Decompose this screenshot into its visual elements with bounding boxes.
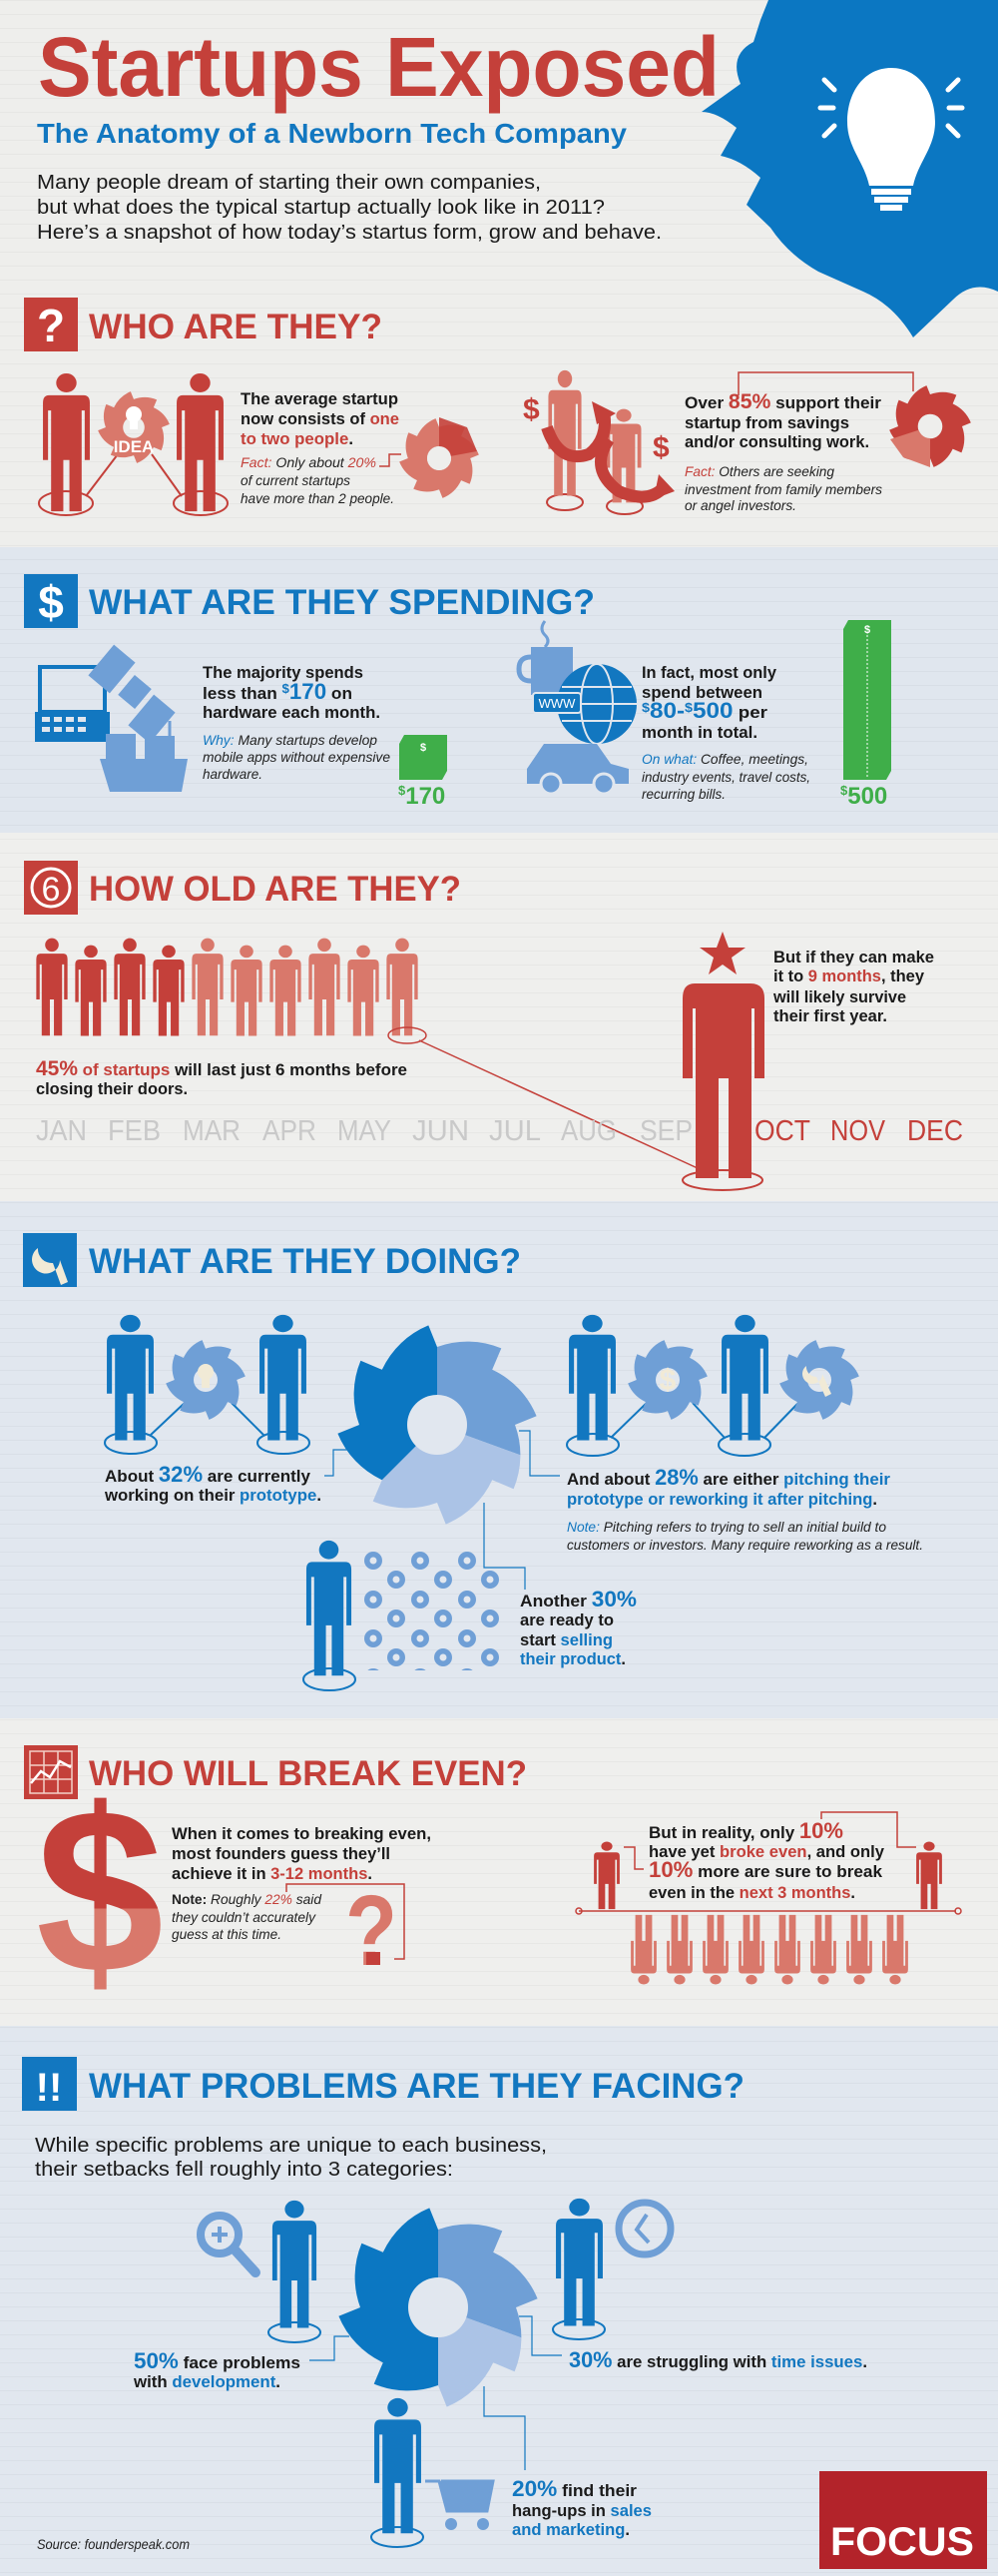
logo: FOCUS bbox=[819, 2471, 987, 2569]
months timeline: MAY bbox=[337, 1115, 391, 1147]
text: $170 on hardware: $ bbox=[282, 681, 290, 696]
text: 32% prototype bbox=[104, 1462, 321, 1505]
text: 28% pitching: prototype or reworking it after pitching. bbox=[567, 1490, 877, 1509]
months timeline: NOV bbox=[830, 1115, 886, 1147]
text: founders guess 3-12 months: Note: Roughly 22% said bbox=[172, 1891, 322, 1907]
heading: how old: HOW OLD ARE THEY? bbox=[89, 870, 461, 909]
text: one to two people: have more than 2 people. bbox=[241, 490, 394, 506]
heading: problems: !! bbox=[36, 2066, 62, 2110]
icon: figure with many gears bbox=[303, 1541, 504, 1690]
text: $170 on hardware: less than bbox=[203, 684, 276, 703]
text: $80-$500 per month: spend between bbox=[642, 683, 762, 702]
months timeline bbox=[36, 1115, 963, 1147]
intro text: Here’s a snapshot of how today’s startus form, grow and behave. bbox=[37, 222, 662, 244]
text: 85% self-funded: and/or consulting work. bbox=[685, 432, 869, 451]
text: 30% selling: Another 30% bbox=[520, 1587, 637, 1611]
text: $80-$500 per month: per bbox=[738, 703, 764, 722]
icon: self-funding figures with arrows: $ bbox=[653, 431, 670, 464]
text: 30% selling: are ready to bbox=[520, 1610, 614, 1629]
text: founders guess 3-12 months: guess at this time. bbox=[172, 1926, 281, 1942]
text: 32% prototype: working on their prototype. bbox=[104, 1486, 321, 1505]
panel: what are they doing bbox=[23, 1233, 923, 1690]
icon: question mark with bracket: ? bbox=[345, 1875, 397, 1987]
text: 28% pitching: And about 28% are either pitching their bbox=[567, 1465, 890, 1490]
months timeline: SEP bbox=[640, 1115, 693, 1147]
text: 30% selling: their product. bbox=[520, 1649, 626, 1668]
text: 28% pitching: Note: Pitching refers to trying to sell an initial build to bbox=[567, 1519, 886, 1535]
text: 85% self-funded: Over 85% support their bbox=[685, 390, 881, 413]
text: $170 on hardware: hardware. bbox=[203, 766, 262, 782]
text: survive 9 months: will likely survive bbox=[772, 987, 906, 1006]
text: problems intro bbox=[35, 2135, 547, 2181]
text: 50% development bbox=[133, 2348, 300, 2391]
icon: two figures with idea saw (prototype) bbox=[105, 1315, 309, 1454]
text: 28% pitching: customers or investors. Many require reworking as a result. bbox=[567, 1537, 923, 1553]
text: $170 on hardware: 170 bbox=[289, 679, 326, 704]
panel: what problems are they facing bbox=[22, 2057, 987, 2569]
chart: tri-colour saw blade bbox=[337, 1325, 537, 1524]
text: $80-$500 per month: recurring bills. bbox=[642, 786, 726, 802]
text: $80-$500 per month: month in total. bbox=[642, 723, 757, 742]
subtitle: The Anatomy of a Newborn Tech Company bbox=[37, 118, 627, 149]
icon: question mark with bracket bbox=[286, 1875, 404, 1987]
text: $170 on hardware: mobile apps without expensive bbox=[203, 749, 390, 765]
heading: problems bbox=[22, 2057, 745, 2111]
months timeline: FEB bbox=[108, 1115, 161, 1147]
icon: coffee, globe and car bbox=[519, 621, 637, 794]
panel: how old are they bbox=[24, 861, 963, 1190]
text: 45% of startups bbox=[36, 1057, 407, 1098]
text: 20% sales and marketing bbox=[512, 2476, 652, 2539]
text: founders guess 3-12 months: achieve it in 3-12 months. bbox=[172, 1864, 372, 1883]
text: 45% of startups: 45% of startups will last just 6 months before bbox=[36, 1057, 407, 1080]
icon: laptop, satellite and boat bbox=[35, 645, 188, 792]
logo: FOCUS: FOCUS bbox=[830, 2520, 974, 2564]
heading: break even: WHO WILL BREAK EVEN? bbox=[89, 1754, 527, 1793]
panel: who are they bbox=[24, 298, 971, 515]
icon: self-funding figures with arrows bbox=[523, 370, 675, 514]
months timeline: JAN bbox=[36, 1115, 87, 1147]
chart: $170 bill stack: $ bbox=[420, 742, 426, 754]
icon: figure with magnifier bbox=[201, 2201, 320, 2342]
icon: big survivor figure with star bbox=[683, 932, 764, 1190]
heading: how old bbox=[24, 861, 461, 915]
text: 20% sales and marketing: 20% find their bbox=[512, 2476, 637, 2501]
months timeline: AUG bbox=[561, 1115, 617, 1147]
text: only 10% broke even: But in reality, only 10% bbox=[649, 1818, 843, 1843]
text: 85% self-funded: startup from savings bbox=[685, 413, 849, 432]
icon: figure with cart bbox=[371, 2398, 493, 2547]
text: $80-$500 per month: In fact, most only bbox=[642, 663, 777, 682]
text: only 10% broke even: even in the next 3 months. bbox=[649, 1883, 855, 1902]
text: one to two people: of current startups bbox=[241, 472, 350, 488]
text: survive 9 months: their first year. bbox=[773, 1006, 887, 1025]
heading: break even bbox=[24, 1745, 527, 1799]
icon: figure with clock bbox=[553, 2199, 671, 2339]
icon: blue burst with light bulb bbox=[702, 0, 998, 337]
text: $80-$500 per month: $ bbox=[685, 700, 694, 715]
text: $80-$500 per month: 80- bbox=[650, 698, 685, 723]
text: founders guess 3-12 months bbox=[172, 1824, 431, 1942]
text: 85% self-funded bbox=[685, 372, 913, 513]
source: Source: founderspeak.com bbox=[37, 2536, 190, 2552]
text: one to two people: Fact: Only about 20% bbox=[241, 454, 376, 470]
text: 85% self-funded: investment from family members bbox=[685, 481, 882, 497]
icon: two founders with idea saw bbox=[39, 373, 228, 515]
icon: big dollar sign: $ bbox=[36, 1759, 164, 2022]
text: only 10% broke even bbox=[649, 1818, 885, 1902]
text: one to two people: The average startup bbox=[241, 389, 398, 408]
intro text bbox=[37, 172, 662, 244]
text: 45% of startups: closing their doors. bbox=[36, 1079, 188, 1098]
icon: red saw 85% bbox=[889, 385, 971, 467]
chart: row of 10 startup figures bbox=[36, 939, 418, 1035]
text: 85% self-funded: Fact: Others are seeking bbox=[685, 463, 834, 479]
icon: two founders with idea saw: IDEA bbox=[114, 437, 154, 456]
text: founders guess 3-12 months: most founders guess they’ll bbox=[172, 1844, 390, 1863]
months timeline: JUN bbox=[412, 1115, 469, 1147]
title: Startups Exposed bbox=[38, 20, 720, 114]
text: only 10% broke even: 10% more are sure to break bbox=[649, 1857, 883, 1882]
panel: what are they spending bbox=[24, 574, 891, 810]
text: one to two people: to two people. bbox=[241, 429, 353, 448]
icon: red saw 20% bbox=[379, 417, 479, 498]
heading: doing bbox=[23, 1233, 521, 1287]
arrow: connector lines bbox=[324, 1431, 560, 1590]
chart: problems saw blade bbox=[338, 2208, 537, 2406]
heading: how old: 6 bbox=[42, 871, 60, 909]
chart: $500 bill stack: $ bbox=[840, 783, 848, 798]
heading: problems: WHAT PROBLEMS ARE THEY FACING? bbox=[89, 2067, 745, 2106]
text: 30% time issues: 30% are struggling with time issues. bbox=[569, 2347, 867, 2372]
chart: $500 bill stack: $ bbox=[864, 624, 870, 636]
text: one to two people: now consists of one bbox=[241, 409, 399, 428]
icon: coffee, globe and car: WWW bbox=[539, 696, 576, 711]
text: 85% self-funded: or angel investors. bbox=[685, 497, 796, 513]
chart: $170 bill stack bbox=[398, 735, 447, 810]
text: survive 9 months bbox=[772, 948, 934, 1025]
text: survive 9 months: But if they can make bbox=[773, 948, 934, 966]
text: 32% prototype: About 32% are currently bbox=[105, 1462, 311, 1487]
chart: $170 bill stack: 170 bbox=[405, 783, 445, 810]
chart: $500 bill stack: 500 bbox=[847, 783, 887, 810]
text: survive 9 months: it to 9 months, they bbox=[773, 966, 925, 985]
heading: spending: WHAT ARE THEY SPENDING? bbox=[89, 583, 595, 622]
panel: who will break even bbox=[24, 1745, 961, 2022]
arrow: problem connectors bbox=[309, 2316, 562, 2470]
text: 28% pitching bbox=[567, 1465, 923, 1553]
icon: self-funding figures with arrows: $ bbox=[523, 393, 540, 426]
months timeline: DEC bbox=[907, 1115, 963, 1147]
months timeline: JUL bbox=[489, 1115, 541, 1147]
text: 30% selling bbox=[520, 1587, 637, 1668]
text: 50% development: with development. bbox=[133, 2372, 280, 2391]
text: $170 on hardware bbox=[203, 663, 390, 782]
text: one to two people bbox=[241, 389, 399, 506]
text: 20% sales and marketing: and marketing. bbox=[512, 2520, 630, 2539]
heading: doing: WHAT ARE THEY DOING? bbox=[89, 1242, 521, 1281]
text: $80-$500 per month: $ bbox=[642, 700, 651, 715]
heading: who are they: ? bbox=[37, 300, 65, 351]
chart: $500 bill stack bbox=[840, 620, 891, 810]
text: $170 on hardware: The majority spends bbox=[203, 663, 363, 682]
text: 30% selling: start selling bbox=[520, 1630, 613, 1649]
heading: who are they: WHO ARE THEY? bbox=[89, 308, 382, 346]
text: only 10% broke even: have yet broke even, and only bbox=[649, 1842, 885, 1861]
months timeline: APR bbox=[262, 1115, 316, 1147]
text: $80-$500 per month bbox=[642, 663, 810, 802]
heading: who are they bbox=[24, 298, 382, 351]
text: $80-$500 per month: 500 bbox=[693, 698, 734, 723]
text: $80-$500 per month: On what: Coffee, meetings, bbox=[642, 751, 808, 767]
months timeline: OCT bbox=[754, 1115, 810, 1147]
months timeline: MAR bbox=[183, 1115, 241, 1147]
text: $80-$500 per month: industry events, travel costs, bbox=[642, 769, 810, 785]
text: 50% development: 50% face problems bbox=[134, 2348, 300, 2373]
chart: standing vs hanging figures bbox=[576, 1812, 961, 1985]
arrow: line to 9-month survivor bbox=[388, 1027, 711, 1174]
heading: spending: $ bbox=[38, 576, 64, 628]
intro text: Many people dream of starting their own companies, bbox=[37, 172, 541, 194]
intro text: but what does the typical startup actually look like in 2011? bbox=[37, 197, 605, 219]
text: problems intro: their setbacks fell roughly into 3 categories: bbox=[35, 2159, 453, 2181]
icon: figures with dollar and wrench saws bbox=[567, 1315, 859, 1456]
heading: spending bbox=[24, 574, 595, 628]
text: 20% sales and marketing: hang-ups in sales bbox=[512, 2501, 652, 2520]
icon: figures with dollar and wrench saws: $ bbox=[660, 1364, 677, 1397]
text: $170 on hardware: Why: Many startups develop bbox=[203, 732, 377, 748]
text: $170 on hardware: hardware each month. bbox=[203, 703, 380, 722]
text: founders guess 3-12 months: When it comes to breaking even, bbox=[172, 1824, 431, 1843]
text: problems intro: While specific problems are unique to each business, bbox=[35, 2135, 547, 2157]
chart: $170 bill stack: $ bbox=[398, 783, 406, 798]
text: $170 on hardware: on bbox=[331, 684, 352, 703]
text: founders guess 3-12 months: they couldn’t accurately bbox=[172, 1909, 316, 1925]
